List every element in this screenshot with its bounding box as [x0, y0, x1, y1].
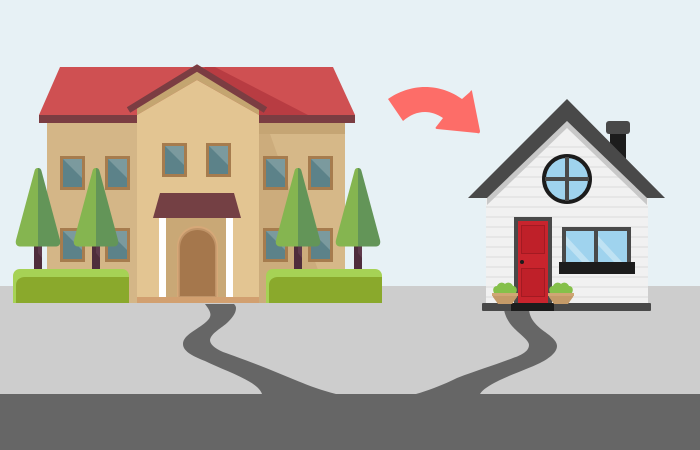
- porch door: [177, 226, 218, 297]
- front step: [137, 297, 259, 303]
- ground: [0, 286, 700, 394]
- platform: [482, 303, 651, 311]
- centre block: [137, 80, 259, 303]
- left driveway: [183, 304, 336, 394]
- right wing wall: [259, 123, 345, 303]
- porch roof: [153, 193, 241, 218]
- wall: [486, 121, 648, 304]
- large house: [39, 67, 355, 303]
- round window: [544, 156, 590, 202]
- windows: [60, 143, 333, 262]
- siding lines: [486, 146, 648, 298]
- roof under-shadow: [487, 121, 647, 205]
- porch columns: [159, 218, 166, 297]
- roof: [468, 99, 665, 198]
- road: [0, 394, 700, 450]
- right wing top band: [259, 123, 345, 134]
- right wing wall shadow: [259, 134, 318, 303]
- small house: [468, 99, 665, 311]
- porch back wall: [166, 218, 226, 297]
- main roof: [39, 67, 355, 115]
- right driveway: [416, 304, 557, 394]
- roof shadow: [197, 67, 308, 115]
- trees: [16, 168, 380, 269]
- side window: [559, 227, 635, 274]
- chimney: [606, 121, 630, 166]
- gable fascia: [128, 68, 266, 110]
- left hedge: [13, 269, 129, 303]
- right hedge: [266, 269, 382, 303]
- gable shade: [137, 70, 259, 115]
- plant pots: [492, 283, 574, 304]
- door: [514, 217, 552, 303]
- arrow: [388, 87, 480, 133]
- left wing wall: [47, 123, 137, 303]
- roof fascia: [39, 115, 355, 123]
